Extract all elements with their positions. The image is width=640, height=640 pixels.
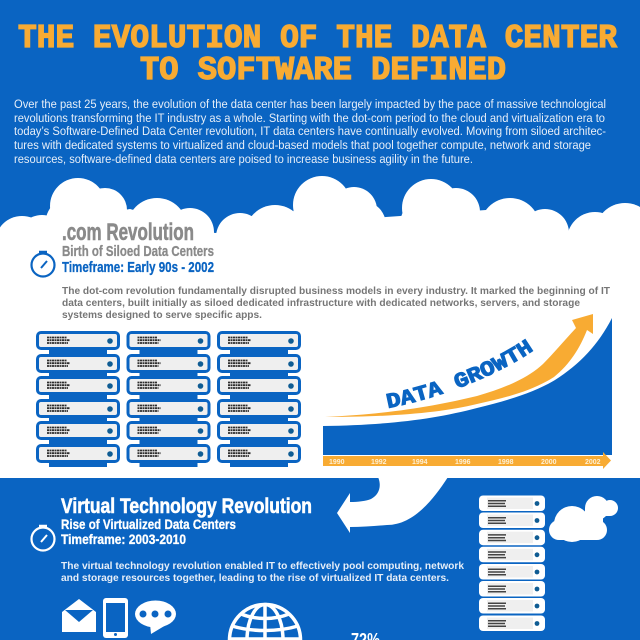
text: virtual technology description: [61, 560, 464, 584]
title: TO SOFTWARE DEFINED: [140, 52, 506, 89]
virtualized server stack: [479, 496, 545, 631]
timeline: [323, 452, 611, 469]
chart: data growth: 1994: [412, 459, 428, 466]
section: virtual technology heading: Virtual Technology Revolution: [61, 495, 312, 518]
growth arrow: [325, 314, 593, 417]
intro text: resources, software-defined data centers are poised to increase business agility in the future.: [14, 152, 473, 166]
chart: data growth: 1998: [498, 459, 514, 466]
icon: envelope: [62, 599, 96, 632]
chart: data growth: DATA GROWTH: [386, 338, 534, 408]
white cloud section: [0, 176, 640, 478]
text: virtual technology description: The virtual technology revolution enabled IT to effectively pool computing, network: [61, 560, 464, 572]
title: THE EVOLUTION OF THE DATA CENTER: [18, 20, 617, 57]
section: com revolution heading: [62, 219, 214, 276]
text: dot-com description: The dot-com revolution fundamentally disrupted business models in every industry. It marked the beginning of IT: [62, 285, 611, 297]
icon: stopwatch blue: [32, 252, 54, 276]
server racks: [38, 332, 300, 467]
area: [323, 318, 612, 455]
section: com revolution heading: Timeframe: Early 90s - 2002: [62, 259, 214, 276]
section: com revolution heading: Birth of Siloed Data Centers: [62, 243, 214, 260]
section: virtual technology heading: [61, 495, 312, 547]
text: dot-com description: systems designed to serve specific apps.: [62, 309, 262, 321]
curve label: [388, 347, 538, 408]
intro text: today’s Software-Defined Data Center revolution, IT data centers have continually evolved. Moving from siloed architec-: [14, 124, 606, 138]
icon: phone: [103, 598, 128, 638]
arrow: white curved: [337, 477, 448, 533]
chart: data growth: 2002: [585, 459, 601, 466]
icon: chat bubble: [135, 600, 176, 634]
text: virtual technology description: and storage resources together, leading to the rise of virtualized IT data centers.: [61, 572, 449, 584]
section: com revolution heading: .com Revolution: [62, 219, 194, 246]
text: dot-com description: data centers, built initially as siloed dedicated infrastructure with dedicated networks, servers, and storage: [62, 297, 580, 309]
chart: data growth: [323, 314, 612, 469]
icon: stopwatch white: [32, 526, 54, 550]
section: virtual technology heading: Rise of Virtualized Data Centers: [61, 516, 236, 532]
intro text: tures with dedicated systems to virtualized and cloud-based models that pool together compute, network and storage: [14, 138, 591, 152]
chart: data growth: 1996: [455, 459, 471, 466]
text: dot-com description: [62, 285, 611, 321]
chart: data growth: 1990: [329, 459, 345, 466]
icon: globe: [229, 604, 301, 640]
section: virtual technology heading: Timeframe: 2003-2010: [61, 531, 186, 547]
icon: white cloud: [549, 496, 618, 542]
chart: data growth: 1992: [371, 459, 387, 466]
title: [18, 20, 617, 89]
chart: data growth: 2000: [541, 459, 557, 466]
intro text: [14, 97, 606, 166]
